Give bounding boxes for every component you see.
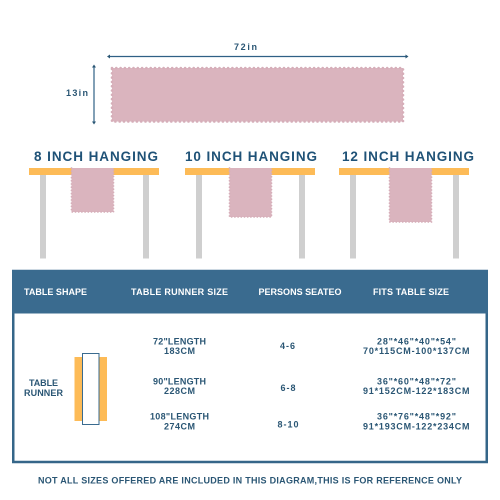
table header band: TABLE SHAPE bbox=[24, 287, 87, 297]
runner sizes: 183CM bbox=[164, 346, 195, 356]
heading: 8 INCH HANGING bbox=[34, 149, 158, 164]
icon: table with runner bbox=[74, 354, 107, 424]
height label: 13in bbox=[66, 88, 88, 98]
runner sizes bbox=[150, 336, 209, 432]
runner sizes: 274CM bbox=[164, 422, 195, 432]
table header band: FITS TABLE SIZE bbox=[373, 287, 449, 297]
heading: 12 INCH HANGING bbox=[342, 149, 474, 164]
runner sizes: 228CM bbox=[164, 386, 195, 396]
fits table sizes: 91*193CM-122*234CM bbox=[363, 422, 470, 432]
size table panel bbox=[12, 270, 488, 462]
width label: 72in bbox=[234, 42, 257, 52]
persons seated bbox=[278, 341, 298, 430]
table shape label bbox=[24, 378, 64, 398]
fits table sizes: 28"*46"*40"*54" bbox=[377, 336, 456, 346]
runner sizes: 72"LENGTH bbox=[153, 336, 206, 346]
table bbox=[29, 168, 159, 258]
hanging diagram: 12 inch bbox=[339, 149, 474, 258]
table header band: TABLE RUNNER SIZE bbox=[131, 287, 228, 297]
fits table sizes: 36"*76"*48"*92" bbox=[377, 412, 456, 422]
table header band bbox=[12, 270, 488, 314]
table bbox=[185, 168, 315, 258]
width arrow bbox=[107, 54, 408, 58]
runner diagram bbox=[66, 42, 408, 124]
persons seated: 8-10 bbox=[278, 420, 298, 430]
pink runner bbox=[112, 68, 403, 122]
persons seated: 6-8 bbox=[280, 383, 296, 393]
table frame bbox=[13, 271, 487, 462]
hanging diagram: 8 inch bbox=[29, 149, 159, 258]
hanging runner bbox=[390, 168, 432, 222]
fits table sizes bbox=[363, 336, 470, 432]
fits table sizes: 91*152CM-122*183CM bbox=[363, 386, 470, 396]
fits table sizes: 36"*60"*48"*72" bbox=[377, 376, 456, 386]
runner sizes: 108"LENGTH bbox=[150, 412, 209, 422]
height arrow bbox=[92, 64, 96, 124]
runner sizes: 90"LENGTH bbox=[153, 376, 206, 386]
footer note: NOT ALL SIZES OFFERED ARE INCLUDED IN THIS DIAGRAM,THIS IS FOR REFERENCE ONLY bbox=[38, 476, 462, 486]
hanging runner bbox=[72, 168, 114, 212]
table header band: PERSONS SEATEO bbox=[258, 287, 342, 297]
table bbox=[339, 168, 469, 258]
table shape label: TABLE bbox=[29, 378, 58, 388]
heading: 10 INCH HANGING bbox=[185, 149, 317, 164]
persons seated: 4-6 bbox=[280, 341, 295, 351]
fits table sizes: 70*115CM-100*137CM bbox=[363, 346, 470, 356]
hanging diagram: 10 inch bbox=[185, 149, 317, 258]
hanging runner bbox=[230, 168, 272, 217]
table shape label: RUNNER bbox=[24, 388, 64, 398]
